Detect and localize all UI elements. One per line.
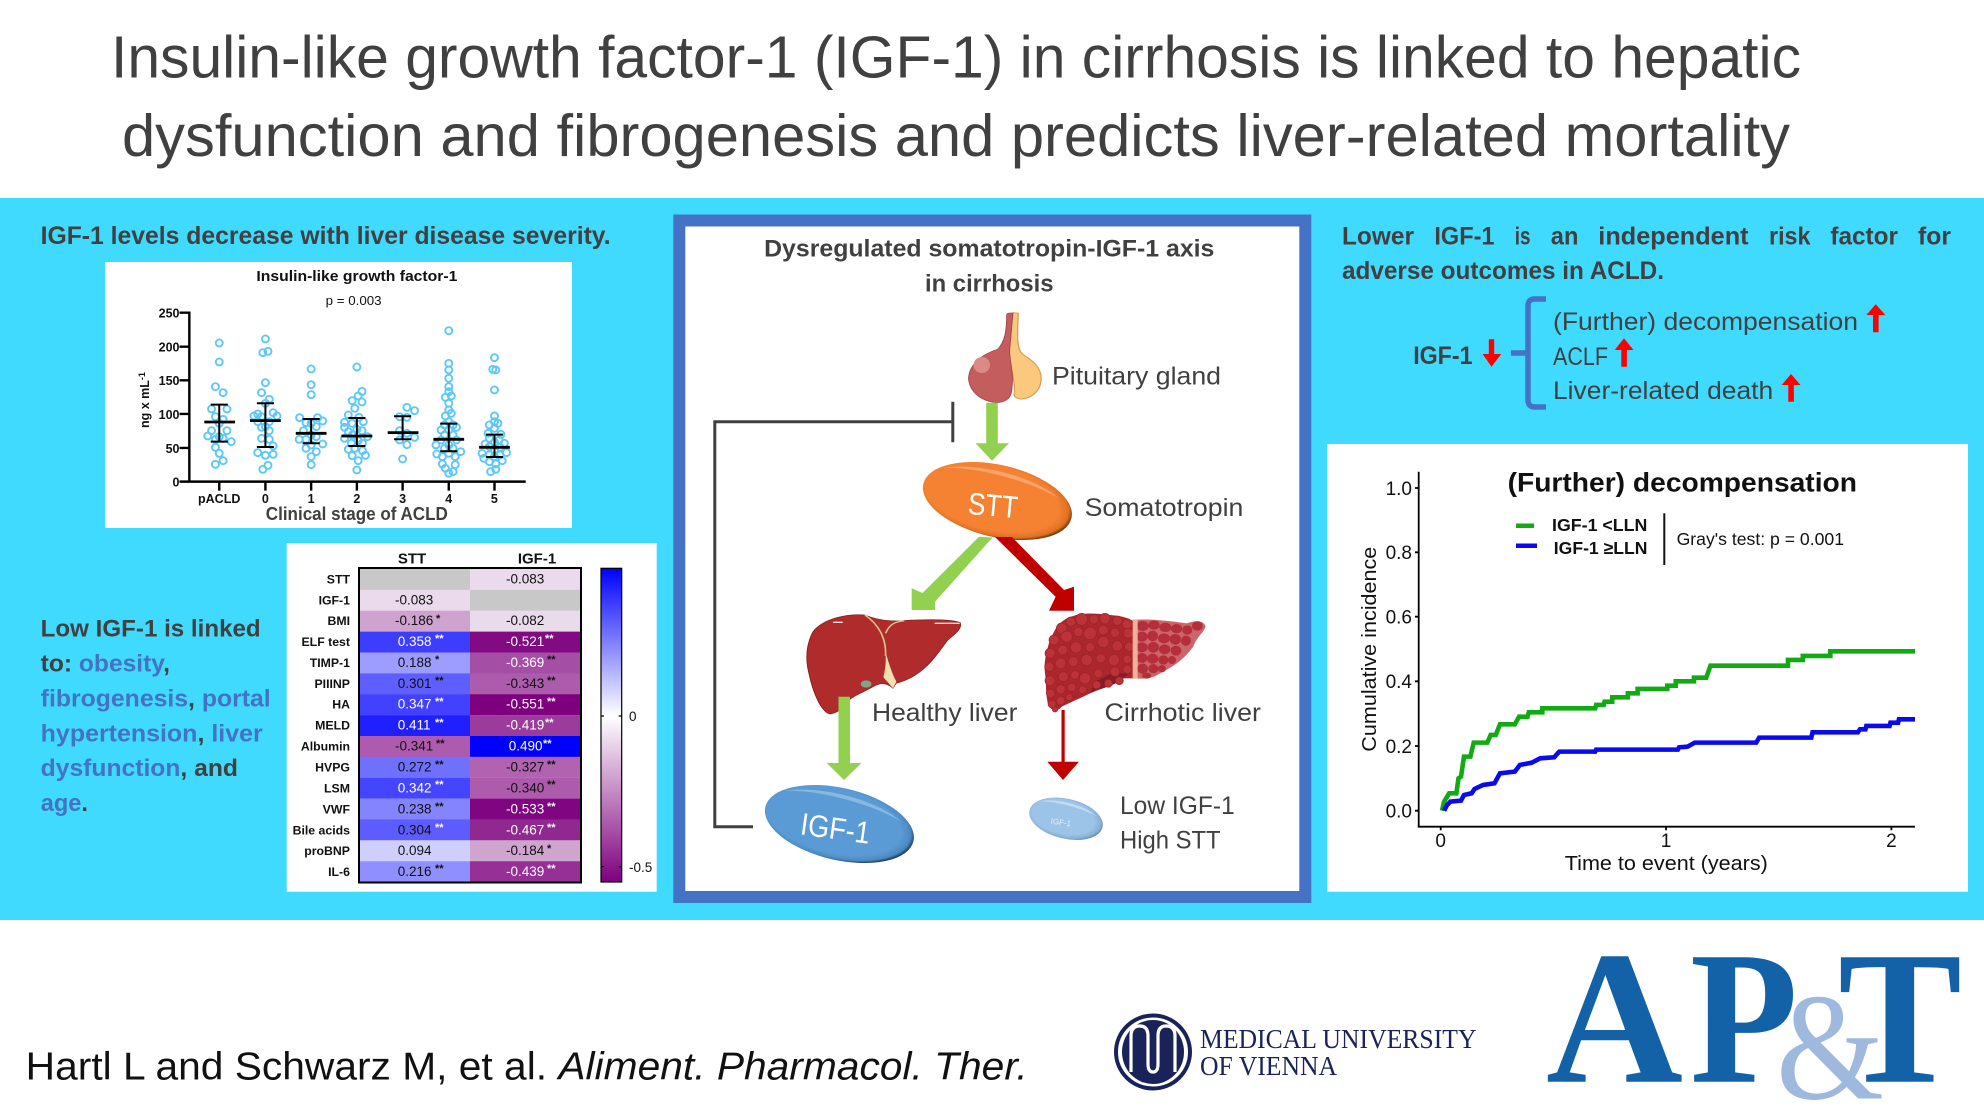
text: low IGF-1 is linked to [41, 616, 271, 817]
heatmap: correlations with STT and IGF-1: ** [435, 717, 444, 729]
heatmap: correlations with STT and IGF-1: ** [547, 779, 556, 791]
heatmap: correlations with STT and IGF-1: 0.358 [398, 634, 431, 649]
curve: IGF-1 at or above LLN [1444, 719, 1915, 811]
label: IGF-1 decreased: IGF-1 [1413, 342, 1473, 370]
list: adverse outcomes: (Further) decompensation [1553, 308, 1858, 336]
panel: IGF-1 as independent risk factor [1327, 222, 1968, 892]
scatter chart: IGF-1 by stage: 0 [262, 492, 269, 506]
scatter chart: IGF-1 by stage: pACLD [198, 492, 240, 506]
heatmap: correlations with STT and IGF-1: -0.343 [506, 676, 544, 691]
heatmap: correlations with STT and IGF-1: 0.342 [398, 780, 431, 796]
heading: lower IGF-1 risk factor: for [1918, 222, 1951, 250]
heading: lower IGF-1 risk factor: Lower [1342, 222, 1414, 250]
line chart: cumulative incidence of further decompensation: 1.0 [1386, 479, 1412, 500]
label: healthy liver: Healthy liver [872, 699, 1017, 727]
heatmap: correlations with STT and IGF-1: -0.184 [506, 843, 545, 858]
heatmap: correlations with STT and IGF-1: ** [547, 759, 556, 771]
heatmap: correlations with STT and IGF-1: -0.341 [395, 738, 433, 754]
heatmap: correlations with STT and IGF-1: -0.369 [506, 655, 544, 670]
heatmap: correlations with STT and IGF-1: ** [436, 738, 445, 750]
icon: pituitary gland [969, 313, 1041, 403]
title: dysfunction and fibrogenesis and predicts liver-related mortality [122, 103, 1790, 169]
heading: lower IGF-1 risk factor: an [1551, 222, 1578, 250]
legend: Gray's test: p = 0.001 [1677, 529, 1844, 549]
heatmap: correlations with STT and IGF-1: ** [435, 779, 444, 791]
heatmap: correlations with STT and IGF-1: 0.490 [509, 738, 542, 754]
label: low IGF-1 high STT: High STT [1120, 826, 1221, 854]
heatmap: correlations with STT and IGF-1: 0.301 [398, 676, 431, 691]
heatmap: correlations with STT and IGF-1: ** [435, 696, 444, 708]
arrow: cirrhotic liver to low IGF-1 [1047, 710, 1079, 780]
heatmap: correlations with STT and IGF-1: -0.327 [506, 760, 544, 774]
citation: Hartl L and Schwarz M, et al. Aliment. Pharmacol. Ther. [26, 1045, 1028, 1088]
line chart: cumulative incidence of further decompensation: Time to event (years) [1565, 853, 1768, 875]
curve: IGF-1 below LLN [1442, 651, 1915, 811]
text: low IGF-1 is linked to: fibrogenesis, portal [41, 686, 271, 713]
heatmap: correlations with STT and IGF-1: MELD [315, 718, 350, 732]
heatmap: correlations with STT and IGF-1: IL-6 [328, 865, 350, 879]
heatmap: correlations with STT and IGF-1: 0.094 [398, 843, 432, 858]
heading: dysregulated axis: Dysregulated somatotropin-IGF-1 axis [764, 236, 1214, 263]
heatmap: correlations with STT and IGF-1: ** [547, 863, 556, 875]
shape: IGF-1 [757, 772, 922, 876]
shape: small IGF-1: IGF-1 [1050, 817, 1072, 828]
line chart: cumulative incidence of further decompensation [1327, 444, 1968, 892]
heatmap: correlations with STT and IGF-1: HVPG [315, 760, 350, 774]
panel: IGF-1 levels by clinical stage [41, 222, 611, 528]
line chart: cumulative incidence of further decompensation: (Further) decompensation [1508, 468, 1857, 498]
heatmap: correlations with STT and IGF-1: ** [545, 717, 554, 729]
heatmap: correlations with STT and IGF-1: -0.439 [506, 864, 544, 879]
title [111, 24, 1801, 169]
heatmap: correlations with STT and IGF-1: 0.272 [398, 760, 431, 774]
heatmap: correlations with STT and IGF-1: LSM [324, 782, 350, 796]
shape: STT: STT [966, 486, 1019, 525]
heatmap: correlations with STT and IGF-1: -0.419 [506, 718, 544, 732]
heading: lower IGF-1 risk factor: IGF-1 [1434, 222, 1495, 250]
heatmap: correlations with STT and IGF-1 [287, 543, 657, 892]
list: adverse outcomes: Liver-related death [1553, 377, 1773, 405]
heatmap: correlations with STT and IGF-1: ** [547, 675, 556, 687]
heading: dysregulated axis: in cirrhosis [925, 271, 1054, 298]
heading: lower IGF-1 risk factor: is [1515, 222, 1530, 250]
heatmap: correlations with STT and IGF-1: -0.521 [506, 634, 544, 649]
legend: IGF-1 <LLN [1552, 515, 1647, 535]
heatmap: correlations with STT and IGF-1: IGF-1 [518, 550, 556, 568]
label: pituitary gland: Pituitary gland [1052, 362, 1221, 390]
heatmap: correlations with STT and IGF-1: -0.551 [506, 696, 544, 712]
heatmap: correlations with STT and IGF-1: ** [547, 654, 556, 666]
heatmap: correlations with STT and IGF-1: BMI [327, 614, 350, 628]
list: adverse outcomes: ACLF [1553, 343, 1608, 371]
heatmap: correlations with STT and IGF-1: VWF [323, 802, 350, 816]
scatter chart: IGF-1 by stage [105, 262, 572, 528]
heading: lower IGF-1 risk factor: factor [1830, 222, 1898, 250]
scatter chart: IGF-1 by stage: 0 [173, 476, 180, 490]
line chart: cumulative incidence of further decompensation: 0.4 [1386, 672, 1412, 693]
heatmap: correlations with STT and IGF-1: Albumin [301, 740, 350, 754]
shape: small IGF-1 [1025, 791, 1107, 847]
label: low IGF-1 high STT: Low IGF-1 [1120, 792, 1235, 820]
scatter chart: IGF-1 by stage: Clinical stage of ACLD [266, 504, 448, 524]
heatmap: correlations with STT and IGF-1: -0.186 [395, 613, 433, 628]
heatmap: correlations with STT and IGF-1: 0.411 [398, 718, 430, 732]
heatmap: correlations with STT and IGF-1: * [436, 613, 441, 625]
heatmap: correlations with STT and IGF-1: STT [327, 572, 350, 586]
panel: dysregulated somatotropin-IGF-1 axis [679, 220, 1305, 897]
heatmap: correlations with STT and IGF-1: -0.340 [506, 780, 544, 796]
heatmap: correlations with STT and IGF-1: ** [435, 633, 444, 645]
heatmap: correlations with STT and IGF-1: ** [543, 738, 552, 750]
heatmap: correlations with STT and IGF-1: -0.083 [506, 572, 544, 586]
brace [1511, 299, 1546, 407]
label: low IGF-1 high STT [1120, 792, 1235, 854]
line chart: cumulative incidence of further decompensation: Cumulative incidence [1358, 547, 1381, 752]
heading: lower IGF-1 risk factor: adverse outcomes in ACLD. [1342, 257, 1664, 285]
heatmap: correlations with STT and IGF-1: ** [435, 675, 444, 687]
color scale legend: 0 [629, 709, 637, 724]
heatmap: correlations with STT and IGF-1: * [547, 843, 552, 855]
arrow: healthy liver to IGF-1 [827, 697, 862, 780]
line chart: cumulative incidence of further decompensation: 2 [1886, 831, 1897, 852]
text: low IGF-1 is linked to: age. [41, 790, 88, 817]
heatmap: correlations with STT and IGF-1: 0.216 [398, 864, 431, 879]
line chart: cumulative incidence of further decompensation: 0.0 [1386, 802, 1412, 822]
color scale legend: -0.5 [629, 860, 652, 875]
list: adverse outcomes [1553, 304, 1885, 405]
heatmap: correlations with STT and IGF-1: -0.083 [395, 592, 433, 608]
scatter chart: IGF-1 by stage: 100 [159, 408, 180, 422]
heatmap: correlations with STT and IGF-1: ** [435, 822, 444, 834]
logo: Medical University of Vienna [1116, 1016, 1476, 1088]
heading: lower IGF-1 risk factor [1342, 222, 1951, 285]
line chart: cumulative incidence of further decompensation: 0.6 [1386, 608, 1412, 628]
heading: IGF-1 levels: IGF-1 levels decrease with liver disease severity. [41, 222, 611, 250]
scatter chart: IGF-1 by stage: Insulin-like growth factor-1 [256, 269, 457, 285]
text: low IGF-1 is linked to: Low IGF-1 is linked [41, 616, 261, 643]
scatter chart: IGF-1 by stage: 4 [445, 492, 452, 506]
icon: healthy liver [807, 615, 961, 714]
legend [1516, 513, 1844, 565]
legend: IGF-1 ≥LLN [1554, 538, 1647, 558]
color scale legend [601, 568, 652, 882]
heatmap: correlations with STT and IGF-1: * [435, 654, 440, 666]
feedback inhibition line [715, 402, 953, 827]
scatter chart: IGF-1 by stage: 3 [399, 492, 406, 506]
heading: lower IGF-1 risk factor: independent [1598, 222, 1749, 250]
shape: IGF-1: IGF-1 [798, 806, 873, 851]
heatmap: correlations with STT and IGF-1: 0.347 [398, 696, 431, 712]
logo: AP&amp;T journal [1546, 914, 1962, 1116]
title: Insulin-like growth factor-1 (IGF-1) in cirrhosis is linked to hepatic [111, 24, 1801, 90]
arrow: STT to healthy liver [912, 537, 992, 610]
scatter chart: IGF-1 by stage: 50 [166, 442, 180, 456]
text: low IGF-1 is linked to: hypertension , liver [41, 721, 263, 748]
heatmap: correlations with STT and IGF-1: 0.238 [398, 802, 431, 816]
heatmap: correlations with STT and IGF-1: 0.188 [398, 655, 431, 670]
panel: low IGF-1 associations [41, 543, 657, 892]
heatmap: correlations with STT and IGF-1: ELF test [301, 635, 350, 649]
text: low IGF-1 is linked to: dysfunction, and [41, 755, 238, 782]
text: low IGF-1 is linked to: to: obesity, [41, 651, 170, 678]
heatmap: correlations with STT and IGF-1: -0.533 [506, 802, 544, 816]
scatter chart: IGF-1 by stage: ng x mL [138, 380, 152, 428]
shape: STT [915, 449, 1080, 553]
heatmap: correlations with STT and IGF-1: IGF-1 [319, 594, 350, 608]
heatmap: correlations with STT and IGF-1: TIMP-1 [310, 656, 350, 670]
heatmap: correlations with STT and IGF-1: ** [547, 696, 556, 708]
scatter chart: IGF-1 by stage: 2 [353, 492, 360, 506]
arrow: pituitary to STT [976, 403, 1009, 461]
scatter chart: IGF-1 by stage: p = 0.003 [326, 293, 382, 308]
heatmap: correlations with STT and IGF-1: proBNP [304, 844, 350, 858]
line chart: cumulative incidence of further decompensation: 0.8 [1386, 543, 1412, 564]
heatmap: correlations with STT and IGF-1: STT [398, 550, 426, 568]
heatmap: correlations with STT and IGF-1: -0.467 [506, 822, 544, 838]
label: somatotropin: Somatotropin [1085, 494, 1243, 522]
heatmap: correlations with STT and IGF-1: Bile acids [293, 824, 350, 838]
heatmap: correlations with STT and IGF-1: ** [547, 801, 556, 813]
heading: dysregulated axis [764, 236, 1214, 298]
arrow: STT to cirrhotic liver [995, 537, 1074, 611]
scatter chart: IGF-1 by stage: 1 [308, 492, 315, 506]
logo: Medical University of Vienna: MEDICAL UNIVERSITY [1200, 1024, 1476, 1054]
heatmap: correlations with STT and IGF-1: 0.304 [398, 822, 432, 838]
scatter chart: IGF-1 by stage: 200 [159, 340, 180, 354]
line chart: cumulative incidence of further decompensation: 0 [1435, 831, 1446, 852]
heatmap: correlations with STT and IGF-1: ** [547, 822, 556, 834]
heatmap: correlations with STT and IGF-1: ** [545, 633, 554, 645]
line chart: cumulative incidence of further decompensation: 1 [1661, 831, 1671, 852]
scatter chart: IGF-1 by stage: 150 [159, 374, 180, 388]
logo: Medical University of Vienna: OF VIENNA [1200, 1051, 1337, 1081]
label: cirrhotic liver: Cirrhotic liver [1104, 699, 1261, 727]
line chart: cumulative incidence of further decompensation: 0.2 [1386, 737, 1412, 758]
scatter chart: IGF-1 by stage: 5 [491, 492, 498, 506]
heatmap: correlations with STT and IGF-1: HA [332, 698, 350, 712]
label: IGF-1 decreased [1413, 339, 1501, 370]
heatmap: correlations with STT and IGF-1: ** [435, 759, 444, 771]
heatmap: correlations with STT and IGF-1: ** [435, 801, 444, 813]
icon: cirrhotic liver [1045, 613, 1206, 712]
heading: lower IGF-1 risk factor: risk [1769, 222, 1811, 250]
heatmap: correlations with STT and IGF-1: PIIINP [314, 677, 350, 691]
scatter chart: IGF-1 by stage: -1 [137, 372, 147, 380]
scatter chart: IGF-1 by stage: 250 [159, 306, 180, 320]
heatmap: correlations with STT and IGF-1: -0.082 [506, 613, 544, 628]
heatmap: correlations with STT and IGF-1: ** [435, 863, 444, 875]
